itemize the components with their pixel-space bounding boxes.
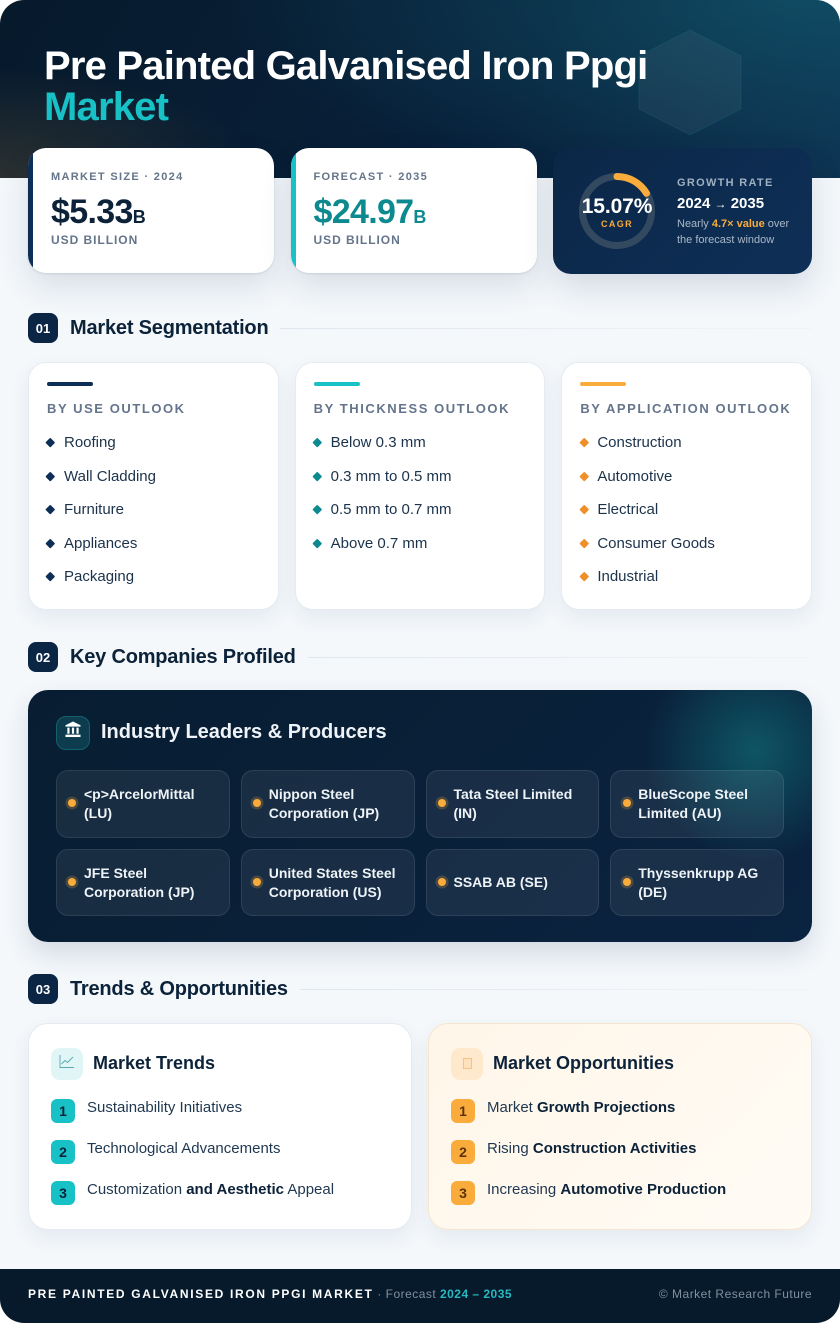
panel: market trends: Technological Advancements: [87, 1140, 280, 1157]
panel: by application outlook: Industrial: [597, 568, 658, 585]
panel: by thickness outlook: 0.3 mm to 0.5 mm: [331, 468, 452, 485]
panel: market opportunities: Rising Construction Activities: [487, 1140, 696, 1157]
ring value: 15.07%: [582, 195, 652, 218]
stat card: market size: [28, 148, 274, 273]
section badge 01: [28, 313, 58, 343]
growth label: GROWTH RATE: [677, 177, 774, 189]
company chip: [426, 770, 599, 838]
ring label: CAGR: [601, 219, 633, 229]
company chip: [56, 849, 230, 916]
icon: placeholder box: [451, 1048, 483, 1080]
panel: by use outlook: Packaging: [64, 568, 134, 585]
panel: by use outlook: Furniture: [64, 501, 124, 518]
title: Pre Painted Galvanised Iron Ppgi: [44, 44, 647, 88]
card heading: Market Opportunities: [493, 1053, 674, 1073]
panel: market trends: [28, 1023, 412, 1230]
footer title: PRE PAINTED GALVANISED IRON PPGI MARKET · Forecast 2024 – 2035: [28, 1287, 512, 1301]
panel: by application outlook: BY APPLICATION OUTLOOK: [580, 401, 791, 416]
company chip: JFE Steel Corporation (JP): [84, 865, 194, 900]
stat card: forecast: [290, 148, 536, 273]
title: Market: [44, 85, 168, 129]
company chip: [610, 770, 784, 838]
footer credit: © Market Research Future: [659, 1287, 812, 1301]
stat card: forecast: $24.97B: [314, 193, 426, 231]
panel: by thickness outlook: [295, 362, 545, 610]
opportunity 1: 1: [459, 1103, 467, 1119]
growth note: [677, 218, 789, 246]
opportunity 3: [451, 1181, 475, 1205]
stat card: forecast: FORECAST · 2035: [314, 171, 428, 183]
opportunity 2: [451, 1140, 475, 1164]
panel: by use outlook: Appliances: [64, 535, 137, 552]
panel: by use outlook: [28, 362, 279, 610]
company chip: <p>ArcelorMittal (LU): [84, 786, 194, 821]
trend 1: [51, 1099, 75, 1123]
company chip: Nippon Steel Corporation (JP): [269, 786, 379, 821]
chart: CAGR ring: [579, 173, 655, 249]
panel heading: Industry Leaders & Producers: [101, 721, 387, 743]
panel: by thickness outlook: Above 0.7 mm: [331, 535, 427, 552]
heading: market segmentation: Market Segmentation: [70, 317, 268, 339]
icon: bank: [56, 716, 90, 750]
opportunity 2: 2: [459, 1144, 467, 1160]
section badge 03: 03: [36, 982, 50, 997]
company chip: Thyssenkrupp AG (DE): [638, 865, 758, 900]
header band: [0, 0, 840, 178]
company chip: [426, 849, 599, 916]
panel: by use outlook: Roofing: [64, 434, 116, 451]
heading: trends: Trends & Opportunities: [70, 978, 288, 1000]
panel: by thickness outlook: 0.5 mm to 0.7 mm: [331, 501, 452, 518]
panel: by use outlook: Wall Cladding: [64, 468, 156, 485]
panel: by application outlook: Consumer Goods: [597, 535, 715, 552]
stat card: forecast: USD BILLION: [314, 233, 401, 247]
company chip: [241, 849, 414, 916]
section badge 02: [28, 642, 58, 672]
company chip: [610, 849, 784, 916]
panel: market opportunities: Increasing Automotive Production: [487, 1181, 726, 1198]
section badge 02: 02: [36, 650, 50, 665]
panel: market opportunities: Market Growth Projections: [487, 1099, 675, 1116]
title: [44, 44, 647, 129]
panel: by use outlook: BY USE OUTLOOK: [47, 401, 186, 416]
panel: industry leaders: [28, 690, 812, 942]
footer: [0, 1269, 840, 1323]
stat card: market size: $5.33B: [51, 193, 146, 231]
growth note: Nearly 4.7× value over: [677, 218, 789, 230]
stat card: market size: USD BILLION: [51, 233, 138, 247]
growth note: the forecast window: [677, 234, 774, 246]
company chip: United States Steel Corporation (US): [269, 865, 396, 900]
icon: chart: [51, 1048, 83, 1080]
company chip: Tata Steel Limited (IN): [454, 786, 572, 821]
panel: by application outlook: [561, 362, 812, 610]
company chip: [241, 770, 414, 838]
company chip: [56, 770, 230, 838]
company chip: BlueScope Steel Limited (AU): [638, 786, 748, 821]
card heading: Market Trends: [93, 1053, 215, 1073]
trend 2: 2: [59, 1144, 67, 1160]
trend 1: 1: [59, 1103, 67, 1119]
panel: market opportunities: [428, 1023, 812, 1230]
panel: by thickness outlook: BY THICKNESS OUTLOOK: [314, 401, 510, 416]
panel: by thickness outlook: Below 0.3 mm: [331, 434, 426, 451]
panel: by application outlook: Electrical: [597, 501, 658, 518]
trend 2: [51, 1140, 75, 1164]
section badge 03: [28, 974, 58, 1004]
heading: key companies: Key Companies Profiled: [70, 646, 296, 668]
opportunity 3: 3: [459, 1185, 467, 1201]
growth years: 2024 → 2035: [677, 195, 764, 212]
section badge 01: 01: [36, 321, 50, 336]
trend 3: [51, 1181, 75, 1205]
opportunity 1: [451, 1099, 475, 1123]
trend 3: 3: [59, 1185, 67, 1201]
stat card: market size: MARKET SIZE · 2024: [51, 171, 184, 183]
panel: market trends: Sustainability Initiatives: [87, 1099, 242, 1116]
company chip: SSAB AB (SE): [454, 874, 548, 890]
icon: decorative hexagon: [638, 30, 742, 136]
stat card: growth rate: [553, 148, 812, 274]
panel: by application outlook: Construction: [597, 434, 682, 451]
panel: by application outlook: Automotive: [597, 468, 672, 485]
panel: market trends: Customization and Aesthetic Appeal: [87, 1181, 334, 1198]
